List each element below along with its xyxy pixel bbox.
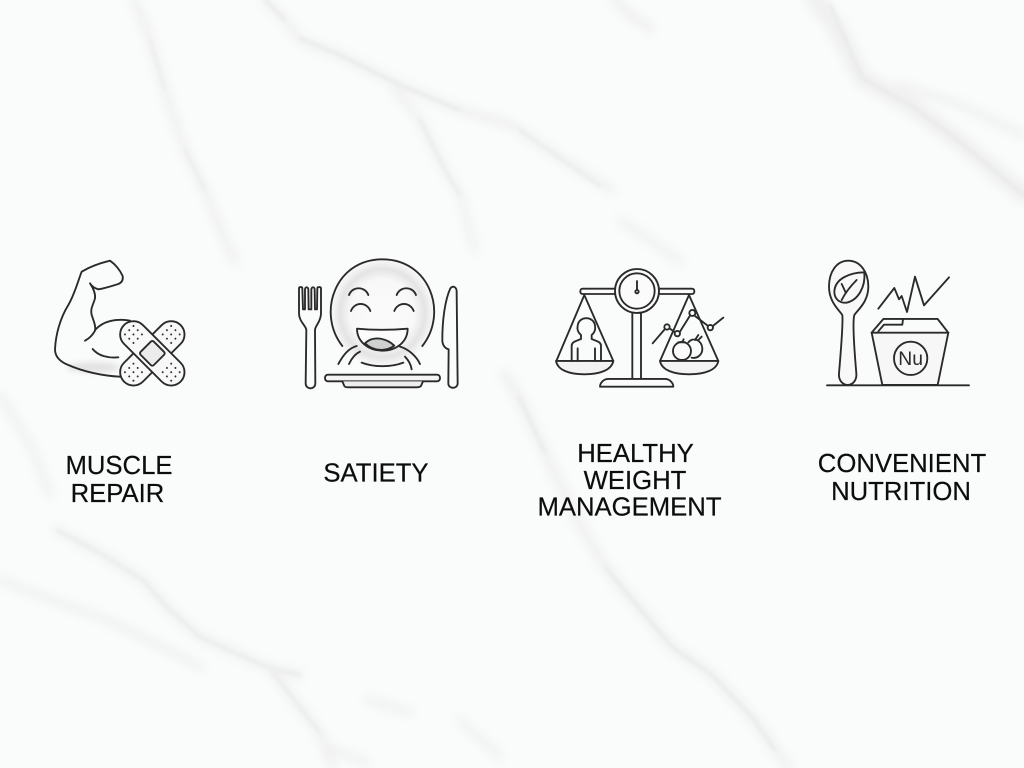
label: muscle repair: REPAIR — [71, 480, 164, 508]
bandage perforations — [124, 325, 181, 382]
bandage centre pad — [139, 340, 166, 367]
plate base — [325, 375, 440, 387]
icon: smiling plate with fork and knife — [299, 259, 458, 388]
trend line — [653, 310, 723, 343]
left pan with person — [556, 295, 613, 374]
nutrient box — [872, 319, 948, 385]
label: convenient nutrition — [818, 450, 987, 506]
icon: balance scale with person and fruit — [556, 269, 723, 387]
label: convenient nutrition: NUTRITION — [831, 478, 971, 506]
label: convenient nutrition: CONVENIENT — [818, 450, 987, 478]
label: healthy weight management: WEIGHT — [584, 467, 687, 495]
plate face — [331, 259, 434, 369]
label: satiety: SATIETY — [323, 460, 429, 488]
icon: flexed muscle with bandage — [55, 261, 190, 391]
fork — [299, 287, 321, 388]
right pan with fruit — [660, 295, 718, 374]
nutrient box: Nu — [898, 349, 923, 370]
knife — [442, 287, 458, 388]
ground line — [827, 383, 969, 388]
label: healthy weight management — [537, 440, 722, 522]
icon: spoon with leaf and nutrient box — [827, 261, 969, 385]
scale beam — [580, 289, 694, 294]
bandage strip one — [115, 316, 190, 391]
bandage strip two — [115, 316, 190, 391]
scale post and base — [600, 313, 673, 387]
label: muscle repair — [65, 452, 173, 508]
leaf — [834, 272, 864, 303]
spoon — [829, 261, 868, 385]
label: muscle repair: MUSCLE — [65, 452, 173, 480]
scale dial — [615, 269, 659, 313]
label: healthy weight management: MANAGEMENT — [537, 494, 722, 522]
label: healthy weight management: HEALTHY — [577, 440, 694, 468]
energy zigzag — [878, 277, 949, 312]
